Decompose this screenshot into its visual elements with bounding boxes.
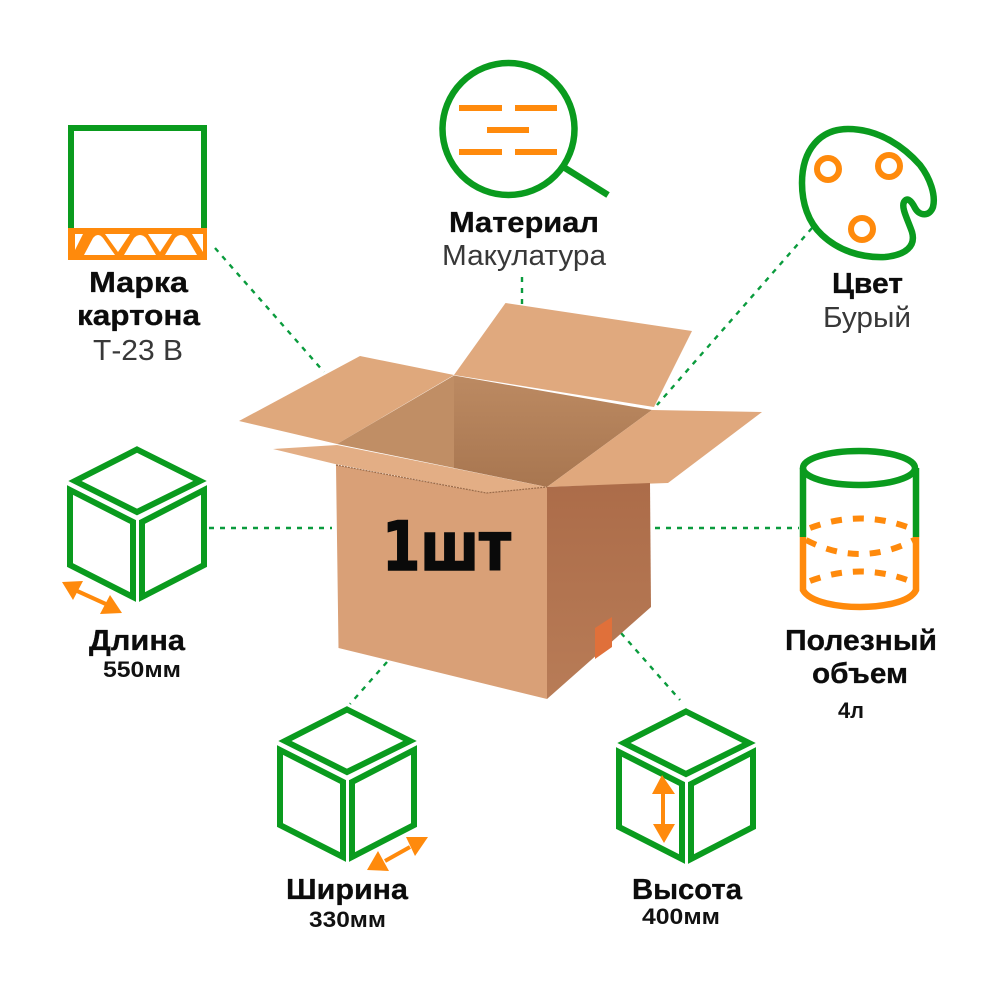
label: colour: Цвет (832, 268, 903, 300)
cardboard box (239, 303, 762, 699)
label: useful volume: 4л (838, 698, 864, 723)
label: colour (823, 268, 911, 334)
label: width: Ширина (286, 874, 409, 906)
label: length: 550мм (103, 657, 181, 682)
icon: cube with height arrow (619, 712, 753, 859)
icon: magnifier (442, 63, 608, 195)
dashed connector lines (209, 228, 812, 704)
label: colour: Бурый (823, 302, 911, 334)
label: cardboard grade: картона (77, 300, 201, 332)
label: cardboard grade: Марка (89, 267, 189, 299)
icon: cube with length arrow (62, 450, 204, 614)
label: material (442, 207, 607, 272)
label: cardboard grade (77, 267, 201, 367)
label: material: Макулатура (442, 240, 607, 272)
label: height: 400мм (642, 904, 720, 929)
icon: cylinder (803, 451, 916, 607)
label: useful volume: Полезный (785, 625, 937, 657)
quantity label on box: 1шт (382, 508, 511, 587)
label: height: Высота (632, 874, 743, 906)
icon: corrugated cardboard (68, 128, 207, 260)
label: length: Длина (89, 625, 186, 657)
label: cardboard grade: Т-23 В (93, 335, 183, 367)
label: useful volume: объем (812, 658, 908, 690)
label: useful volume (785, 625, 937, 723)
label: width (286, 874, 409, 932)
label: material: Материал (449, 207, 599, 239)
icon: palette (802, 129, 934, 257)
label: width: 330мм (309, 907, 386, 932)
label: length (89, 625, 186, 682)
icon: cube with width arrow (280, 710, 428, 871)
label: height (632, 874, 743, 929)
